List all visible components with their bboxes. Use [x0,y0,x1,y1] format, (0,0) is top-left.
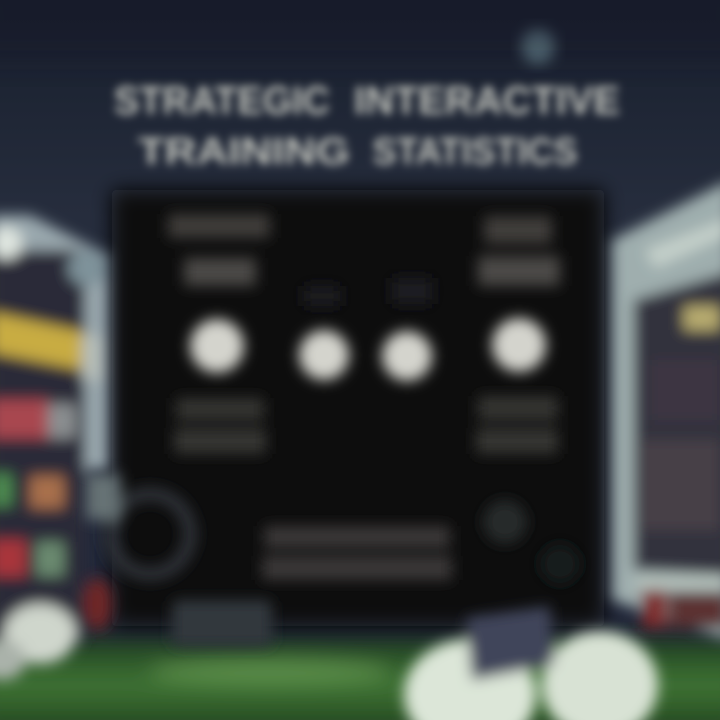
bottom football [404,606,658,720]
stat circles [190,318,546,381]
title [114,79,620,173]
top icon [521,29,555,63]
lower right small icons [483,500,580,584]
grass field [0,640,720,720]
title: INTERACTIVE [354,79,620,123]
circle 4 [492,318,546,372]
title: STRATEGIC [114,79,330,123]
circle 2 [299,330,349,380]
central dark panel [112,190,604,626]
edge vignette [0,0,720,60]
circle 3 [382,331,432,381]
title: TRAINING [138,131,350,173]
right tablet mockup [612,180,720,640]
middle small labels [304,278,432,306]
title: STATISTICS [372,131,578,173]
right description block [476,396,558,454]
circle 1 [190,319,244,373]
bottom left device [172,600,272,646]
right column heading [478,216,560,286]
headset icon [86,474,190,574]
left phone mockup [0,215,112,680]
left description block [174,398,266,454]
bottom centre text block [262,526,452,580]
left column heading [168,214,270,286]
